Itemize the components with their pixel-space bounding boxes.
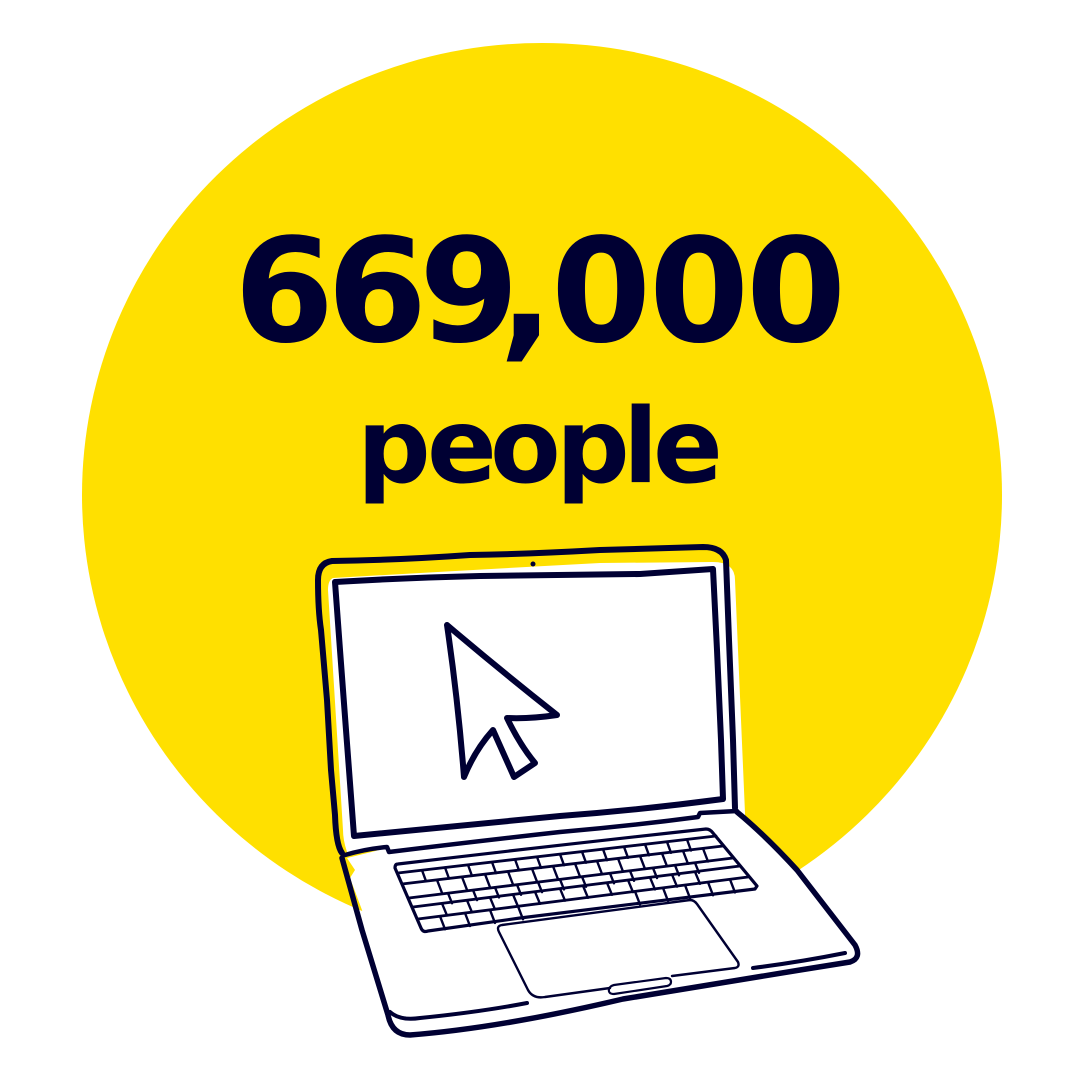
keyboard key dividers <box>422 840 735 929</box>
cursor arrow <box>447 625 557 777</box>
laptop screen bezel <box>335 569 723 836</box>
laptop lid outline <box>318 547 735 853</box>
front edge right lip <box>753 953 845 968</box>
trackpad button <box>609 978 671 994</box>
front edge left lip <box>390 1003 527 1019</box>
laptop white lid fill <box>328 562 745 852</box>
laptop white base fill <box>347 812 858 1035</box>
laptop hinge line <box>345 811 737 855</box>
label: people: people <box>357 387 723 507</box>
keyboard outline <box>395 829 757 932</box>
icon: laptop with cursor <box>318 547 858 1035</box>
yellow background circle <box>82 43 1002 947</box>
webcam dot <box>530 562 536 566</box>
trackpad <box>498 900 739 997</box>
headline number: 669,000: 669,000 <box>234 207 846 375</box>
laptop base outer edge <box>342 812 858 1035</box>
keyboard row lines <box>398 836 748 919</box>
keyboard <box>395 829 757 932</box>
